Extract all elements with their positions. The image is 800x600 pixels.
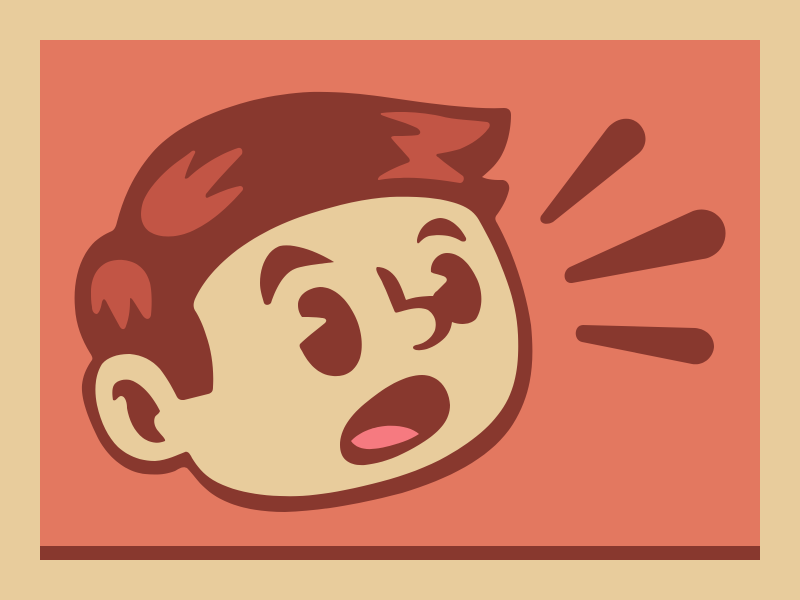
panel: coral background <box>40 40 760 547</box>
face <box>95 197 518 496</box>
hair highlight: top tuft <box>378 112 490 183</box>
surprise line: middle <box>565 210 726 283</box>
head outline and hair <box>75 92 532 512</box>
right eye and cheek line <box>376 253 481 350</box>
surprise line: bottom <box>576 325 714 364</box>
bottom band <box>40 546 760 560</box>
left eye <box>298 287 362 376</box>
tongue <box>351 426 419 449</box>
mouth <box>340 375 450 465</box>
left eyebrow <box>260 245 334 305</box>
hair highlight: left tuft <box>141 148 243 236</box>
ear inner <box>112 380 165 443</box>
right eyebrow <box>417 218 466 243</box>
hair highlight: side tuft <box>91 260 152 329</box>
surprise line: top <box>540 119 646 224</box>
